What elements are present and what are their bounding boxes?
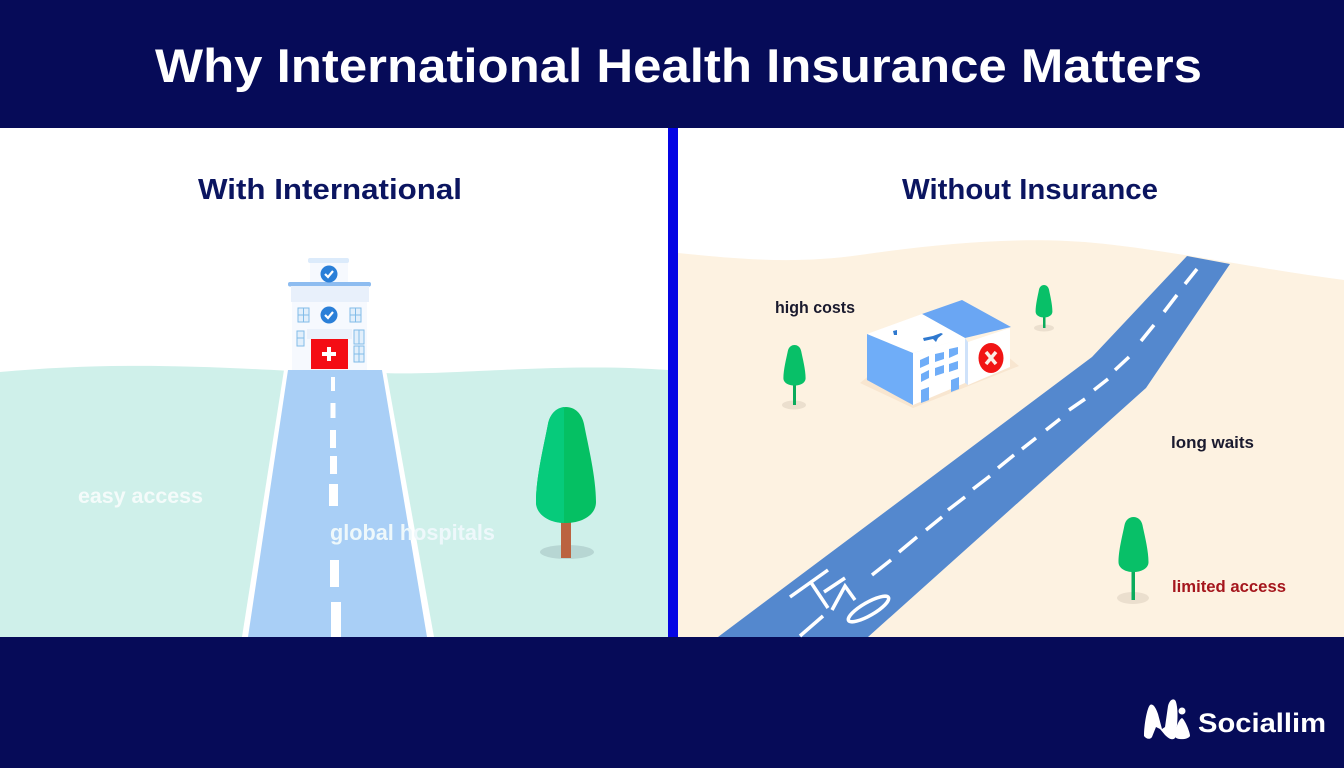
panel: without insurance [678, 128, 1344, 637]
label: long waits: long waits [1171, 433, 1254, 452]
label: easy access: easy access [78, 485, 203, 508]
label: global hospitals: global hospitals [330, 520, 495, 545]
logo: Sociallim [1144, 699, 1326, 739]
icon: red cross sign [311, 339, 348, 369]
title: Why International Health Insurance Matters [155, 39, 1202, 92]
logo wordmark: Sociallim [1198, 708, 1326, 738]
icon: red x badge [978, 343, 1004, 373]
ground: green field [0, 366, 668, 637]
heading: without insurance: Without Insurance [902, 174, 1158, 206]
road lettering [790, 570, 892, 626]
road: winding away [718, 256, 1230, 637]
panel: with international [0, 128, 668, 637]
label: limited access: limited access [1172, 577, 1286, 596]
label: high costs: high costs [775, 298, 855, 317]
icon: isometric hospital [860, 300, 1019, 408]
ground: sand [678, 240, 1344, 637]
icon: hospital [288, 258, 371, 370]
heading: with international: With International [198, 174, 462, 206]
icon: tree [536, 407, 596, 559]
road: straight to hospital [242, 370, 434, 637]
icon: tree small bottom [1117, 517, 1149, 604]
divider [668, 128, 678, 637]
icon: tree small left [782, 345, 806, 410]
icon: tree small top [1034, 285, 1054, 332]
logo mark [1144, 699, 1190, 739]
